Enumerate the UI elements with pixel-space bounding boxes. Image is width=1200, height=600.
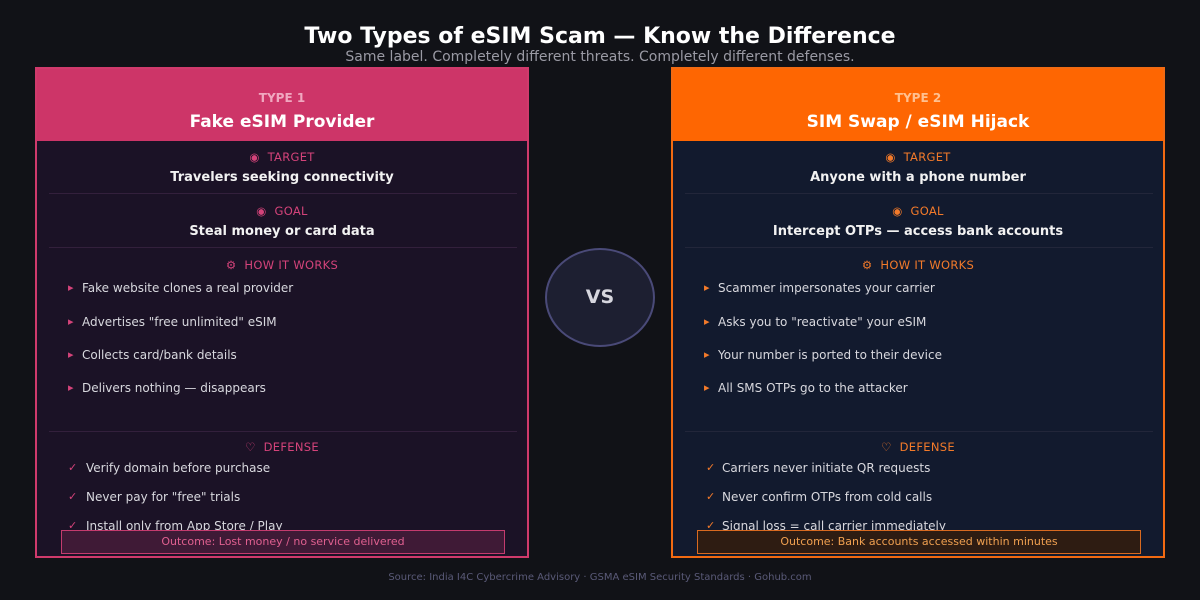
panel header: SIM Swap / eSIM Hijack [807, 112, 1029, 132]
panel: fake eSIM provider: ▸ [68, 281, 74, 294]
subtitle: Same label. Completely different threats. Completely different defenses. [345, 49, 855, 65]
panel header [37, 69, 527, 141]
outcome: Outcome: Lost money / no service delivered [161, 535, 405, 548]
panel: SIM swap / eSIM hijack: Signal loss = call carrier immediately [722, 519, 946, 533]
panel: fake eSIM provider: ▸ [68, 381, 74, 394]
defense: ♡ DEFENSE [881, 440, 955, 454]
panel: fake eSIM provider: Delivers nothing — disappears [82, 381, 266, 395]
panel: SIM swap / eSIM hijack: ▸ [704, 281, 710, 294]
title: Two Types of eSIM Scam — Know the Difference [304, 24, 896, 49]
panel: fake eSIM provider: ✓ [68, 519, 77, 532]
panel: SIM swap / eSIM hijack: ▸ [704, 315, 710, 328]
panel: SIM swap / eSIM hijack: ✓ [706, 490, 715, 503]
panel header: TYPE 1 [259, 91, 305, 105]
panel: fake eSIM provider: ✓ [68, 490, 77, 503]
goal: ◉ GOAL [256, 204, 308, 218]
outcome [61, 530, 505, 554]
target: ◉ TARGET [249, 150, 315, 164]
how it works: ⚙ HOW IT WORKS [862, 258, 974, 272]
panel: fake eSIM provider: Advertises "free unlimited" eSIM [82, 315, 277, 329]
defense: ♡ DEFENSE [245, 440, 319, 454]
panel header: Fake eSIM Provider [190, 112, 374, 132]
outcome [697, 530, 1141, 554]
goal: ◉ GOAL [892, 204, 944, 218]
panel: SIM swap / eSIM hijack: Carriers never initiate QR requests [722, 461, 930, 475]
panel: SIM swap / eSIM hijack: Anyone with a phone number [810, 170, 1026, 185]
defense list [68, 461, 283, 533]
panel: fake eSIM provider: Fake website clones a real provider [82, 281, 293, 295]
panel header [673, 69, 1163, 141]
steps list [68, 281, 294, 395]
panel: fake eSIM provider: Collects card/bank details [82, 348, 237, 362]
panel: SIM swap / eSIM hijack: Intercept OTPs — access bank accounts [773, 224, 1063, 239]
panel: SIM swap / eSIM hijack: ✓ [706, 519, 715, 532]
panel: SIM swap / eSIM hijack: ▸ [704, 348, 710, 361]
panel: fake eSIM provider: ▸ [68, 348, 74, 361]
panel: SIM swap / eSIM hijack: Scammer impersonates your carrier [718, 281, 935, 295]
target: ◉ TARGET [885, 150, 951, 164]
panel: fake eSIM provider: Steal money or card data [189, 224, 375, 239]
panel: fake eSIM provider: Travelers seeking connectivity [170, 170, 394, 185]
panel: fake eSIM provider: Install only from App Store / Play [86, 519, 283, 533]
panel: SIM swap / eSIM hijack: Your number is ported to their device [718, 348, 942, 362]
source footer: Source: India I4C Cybercrime Advisory · GSMA eSIM Security Standards · Gohub.com [388, 572, 812, 583]
panel: fake eSIM provider [35, 67, 529, 558]
panel: fake eSIM provider: ✓ [68, 461, 77, 474]
panel: SIM swap / eSIM hijack: ✓ [706, 461, 715, 474]
how it works: ⚙ HOW IT WORKS [226, 258, 338, 272]
defense list [706, 461, 946, 533]
panel: fake eSIM provider: ▸ [68, 315, 74, 328]
panel: SIM swap / eSIM hijack: Never confirm OTPs from cold calls [722, 490, 932, 504]
VS badge [545, 248, 655, 347]
panel: SIM swap / eSIM hijack: Asks you to "reactivate" your eSIM [718, 315, 926, 329]
steps list [704, 281, 942, 395]
panel: SIM swap / eSIM hijack [671, 67, 1165, 558]
panel: SIM swap / eSIM hijack: All SMS OTPs go to the attacker [718, 381, 908, 395]
panel: fake eSIM provider: Never pay for "free" trials [86, 490, 240, 504]
VS badge: VS [586, 286, 614, 308]
outcome: Outcome: Bank accounts accessed within minutes [780, 535, 1058, 548]
panel header: TYPE 2 [895, 91, 941, 105]
panel: fake eSIM provider: Verify domain before purchase [86, 461, 270, 475]
panel: SIM swap / eSIM hijack: ▸ [704, 381, 710, 394]
